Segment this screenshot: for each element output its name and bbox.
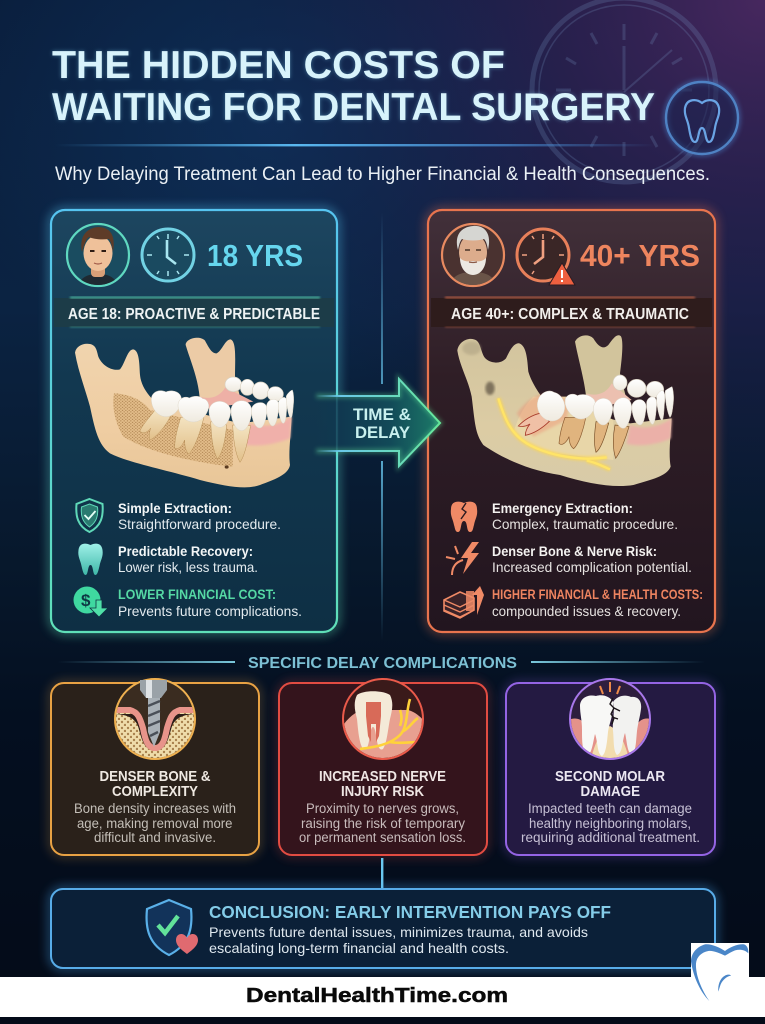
title: THE HIDDEN COSTS OF <box>52 44 505 87</box>
card: nerve injury: INJURY RISK <box>341 783 424 800</box>
risk: denser bone and nerve: Denser Bone & Nerve Risk: <box>492 544 657 559</box>
logo: blue tooth <box>691 943 749 1001</box>
card: denser bone: Bone density increases with <box>74 801 236 816</box>
benefit: predictable recovery: Predictable Recovery: <box>118 544 253 559</box>
panel: age 40+ <box>428 210 715 632</box>
panel: conclusion: CONCLUSION: EARLY INTERVENTION PAYS OFF <box>209 902 611 922</box>
arrow: time and delay: DELAY <box>355 424 410 442</box>
card: second molar: SECOND MOLAR <box>555 768 665 785</box>
footer band <box>0 977 765 1017</box>
center timeline line lower <box>381 461 383 641</box>
risk: emergency extraction: Emergency Extraction: <box>492 501 633 516</box>
connector line <box>381 858 383 889</box>
panel: conclusion: escalating long-term financial and health costs. <box>209 940 509 956</box>
icon: clock with warning <box>517 229 575 285</box>
panel: conclusion: Prevents future dental issues, minimizes trauma, and avoids <box>209 924 588 940</box>
section heading: SPECIFIC DELAY COMPLICATIONS <box>248 655 517 672</box>
icon: dollar with down arrow: $ <box>81 591 91 610</box>
risk: emergency extraction: Complex, traumatic procedure. <box>492 516 678 532</box>
card: second molar <box>506 679 715 855</box>
icon: tooth <box>78 544 103 575</box>
title: WAITING FOR DENTAL SURGERY <box>52 86 655 129</box>
icon: shield with check and heart <box>147 900 198 955</box>
benefit: simple extraction <box>76 499 281 532</box>
panel: age 18 <box>51 210 337 632</box>
card: denser bone: age, making removal more <box>77 816 232 831</box>
panel: conclusion <box>51 889 715 968</box>
risk: emergency extraction <box>451 501 678 532</box>
subtitle: Why Delaying Treatment Can Lead to Higher Financial & Health Consequences. <box>55 164 710 185</box>
risk: denser bone and nerve <box>446 542 692 575</box>
icon: drill in bone <box>114 678 196 760</box>
icon: money stack with up arrow <box>444 586 484 618</box>
benefit: lower financial cost: LOWER FINANCIAL COST: <box>118 587 276 602</box>
icon: broken tooth <box>451 502 477 532</box>
risk: higher costs: compounded issues & recovery. <box>492 603 681 619</box>
avatar: young man <box>67 224 129 287</box>
icon: lightning bolt <box>446 542 479 575</box>
card: nerve injury: raising the risk of temporary <box>301 816 465 831</box>
arrow: time and delay: TIME & <box>353 406 411 424</box>
avatar: older man <box>442 224 504 287</box>
icon: tooth with nerve <box>340 679 430 762</box>
title: THE HIDDEN COSTS OF <box>52 44 505 87</box>
center timeline line upper <box>381 212 383 384</box>
heading band: AGE 18: PROACTIVE & PREDICTABLE <box>68 306 320 323</box>
title: WAITING FOR DENTAL SURGERY <box>52 86 655 129</box>
title divider <box>55 144 655 146</box>
card: nerve injury: Proximity to nerves grows, <box>306 801 459 816</box>
illustration: healthy jaw <box>75 338 294 487</box>
card: second molar: Impacted teeth can damage <box>528 801 692 816</box>
risk: higher costs: HIGHER FINANCIAL & HEALTH COSTS: <box>492 587 703 602</box>
card: denser bone: COMPLEXITY <box>112 783 198 800</box>
benefit: lower financial cost: Prevents future complications. <box>118 603 302 619</box>
benefit: predictable recovery <box>78 544 258 575</box>
title <box>52 44 655 129</box>
card: denser bone <box>51 676 259 855</box>
arrow: time and delay <box>316 379 440 466</box>
icon: cracked molars <box>568 679 654 762</box>
card: second molar: DAMAGE <box>580 783 640 800</box>
benefit: predictable recovery: Lower risk, less trauma. <box>118 559 258 575</box>
age label: 18 YRS <box>207 238 303 273</box>
heading band <box>54 296 334 328</box>
watermark clock <box>532 0 716 182</box>
card: denser bone: difficult and invasive. <box>94 830 216 845</box>
card: nerve injury <box>279 679 487 855</box>
footer band: DentalHealthTime.com <box>246 985 508 1007</box>
benefit: lower financial cost <box>74 586 302 619</box>
card: nerve injury: or permanent sensation loss. <box>299 830 466 845</box>
card: denser bone: DENSER BONE & <box>100 768 211 785</box>
benefit: simple extraction: Simple Extraction: <box>118 501 232 516</box>
icon: clock <box>142 229 194 281</box>
card: second molar: requiring additional treatment. <box>521 830 700 845</box>
risk: higher costs <box>444 586 703 619</box>
illustration: damaged jaw <box>457 335 674 486</box>
icon: shield check <box>76 499 103 532</box>
heading band <box>431 296 712 328</box>
card: nerve injury: INCREASED NERVE <box>319 768 446 785</box>
benefit: simple extraction: Straightforward procedure. <box>118 516 281 532</box>
card: second molar: healthy neighboring molars, <box>529 816 691 831</box>
heading band: AGE 40+: COMPLEX & TRAUMATIC <box>451 306 689 323</box>
age label: 40+ YRS <box>580 238 700 273</box>
icon: dollar with down arrow <box>74 586 108 617</box>
icon: tooth badge <box>666 82 738 154</box>
risk: denser bone and nerve: Increased complication potential. <box>492 559 692 575</box>
